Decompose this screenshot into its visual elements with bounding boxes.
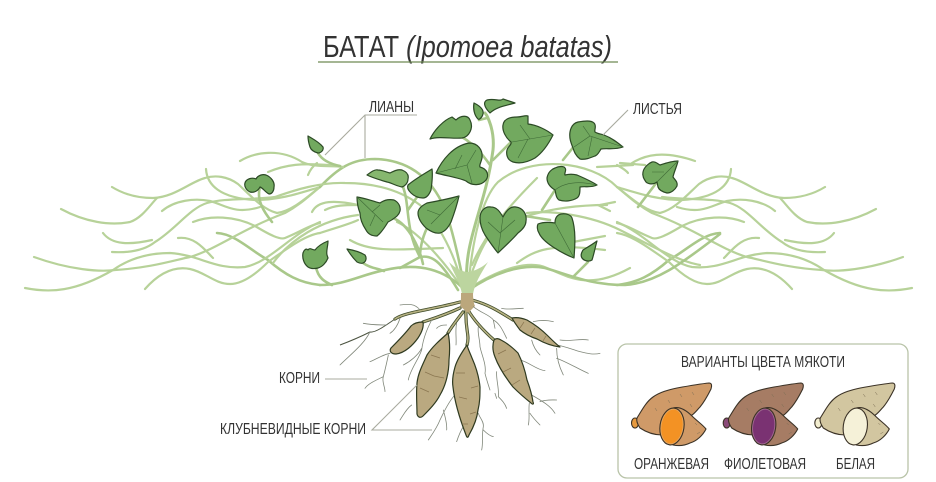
main roots <box>395 300 513 345</box>
leaf: far right <box>643 161 678 193</box>
crown <box>460 293 475 313</box>
leaf: small right <box>581 241 597 261</box>
leaf: large left <box>357 197 400 236</box>
thin root tip <box>340 319 395 345</box>
leaf: top small <box>485 99 515 113</box>
sweet potato: white <box>815 383 895 446</box>
tuber 4 <box>493 338 533 404</box>
label: листья: ЛИСТЬЯ <box>633 101 682 118</box>
label: корни: КОРНИ <box>279 370 320 387</box>
leaf: lower small <box>347 249 366 263</box>
stems <box>259 113 657 290</box>
leaf: large center <box>436 143 488 185</box>
leaves <box>245 99 678 269</box>
trunk <box>449 262 488 294</box>
label: корни <box>279 370 367 387</box>
leaf: right upper <box>570 121 623 159</box>
panel heading: ВАРИАНТЫ ЦВЕТА МЯКОТИ <box>681 354 845 371</box>
leaf: left center <box>418 196 459 233</box>
vines: right outer runners <box>617 169 912 290</box>
label: лианы <box>325 99 417 158</box>
tuber 3 <box>453 345 480 437</box>
tuber 5 <box>512 318 560 347</box>
vines: inner branches <box>240 153 720 290</box>
sweet potato: orange <box>632 383 712 446</box>
leaf: middle right <box>547 166 597 201</box>
leaf: lower left lobed <box>303 241 328 269</box>
leaf: top right <box>503 116 553 163</box>
leaf: top small left <box>308 136 323 153</box>
label: white: БЕЛАЯ <box>836 456 875 473</box>
label: purple: ФИОЛЕТОВАЯ <box>724 456 806 473</box>
label: листья <box>603 101 682 135</box>
sweet potato: purple <box>723 383 803 446</box>
leaf: pointed <box>408 169 432 198</box>
label: orange: ОРАНЖЕВАЯ <box>634 456 709 473</box>
label: клубневидные корни <box>220 385 432 438</box>
title: БАТАТ (Ipomoea batatas) <box>323 29 612 64</box>
vines: left outer runners <box>25 169 320 290</box>
leaf: left of center upper <box>367 170 408 187</box>
leaf: small lobed left <box>245 175 274 194</box>
leaf: heart center <box>480 207 526 253</box>
label: клубневидные корни: КЛУБНЕВИДНЫЕ КОРНИ <box>220 421 366 438</box>
leaf: heart right <box>537 214 575 258</box>
tuber 1 <box>390 322 423 354</box>
label: лианы: ЛИАНЫ <box>369 99 414 116</box>
roots <box>340 293 600 450</box>
tuber 2 <box>417 333 450 417</box>
leaf: bud <box>474 103 483 119</box>
panel: flesh colour variants <box>618 344 908 478</box>
rootlets <box>340 304 600 450</box>
leaf: upper left <box>430 116 471 139</box>
